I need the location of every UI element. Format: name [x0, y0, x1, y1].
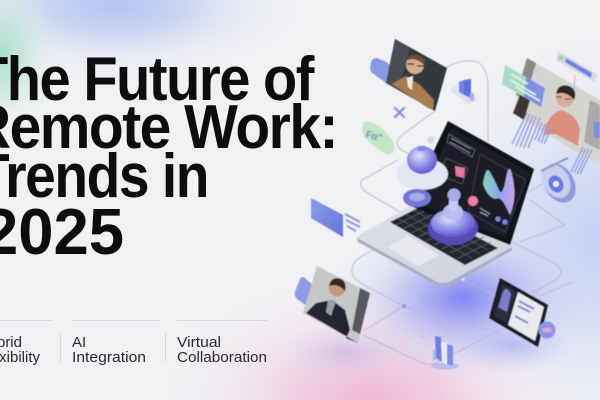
gyroscope device	[536, 157, 582, 209]
video card: man with glasses	[386, 39, 447, 111]
laptop trackpad	[388, 236, 439, 266]
footer trend list	[0, 320, 267, 366]
blue icon beside suit card	[295, 277, 315, 308]
laptop screen	[408, 121, 534, 245]
video card: woman in coral top	[513, 58, 600, 161]
trend: virtual collaboration: Collaboration	[177, 349, 267, 366]
laptop base	[356, 205, 512, 283]
notification pill	[556, 51, 597, 90]
trend: virtual collaboration	[177, 320, 267, 366]
bottom bar chart	[431, 336, 459, 370]
screen pink icons	[455, 166, 465, 178]
glass AI object on keyboard	[428, 188, 478, 245]
blue document card	[311, 198, 360, 237]
trend: AI integration: Integration	[72, 349, 146, 366]
glass apple on disc	[396, 136, 448, 207]
tablet	[489, 278, 556, 347]
trend: AI integration	[72, 320, 160, 366]
green chat bubble: Fα"	[364, 129, 384, 144]
green and blue message bubble	[502, 65, 545, 107]
screen waveform chart	[483, 169, 514, 215]
green chat bubble	[362, 122, 394, 154]
isometric illustration	[295, 39, 600, 370]
laptop	[356, 121, 534, 286]
icon: x sparkle	[395, 108, 404, 117]
trend: AI integration: AI	[72, 334, 86, 351]
connector lines	[352, 61, 572, 364]
video card: man in suit	[303, 266, 370, 343]
title	[0, 44, 337, 268]
laptop keyboard	[390, 207, 498, 265]
screen panels	[447, 134, 475, 157]
streaming data fins	[512, 113, 592, 174]
trend: hybrid flexibility	[0, 320, 53, 366]
trend: virtual collaboration: Virtual	[177, 334, 221, 351]
icon: small blue bar chart top	[450, 79, 478, 104]
ring icon	[410, 339, 422, 351]
icon: blue folder beside video card	[370, 58, 392, 84]
